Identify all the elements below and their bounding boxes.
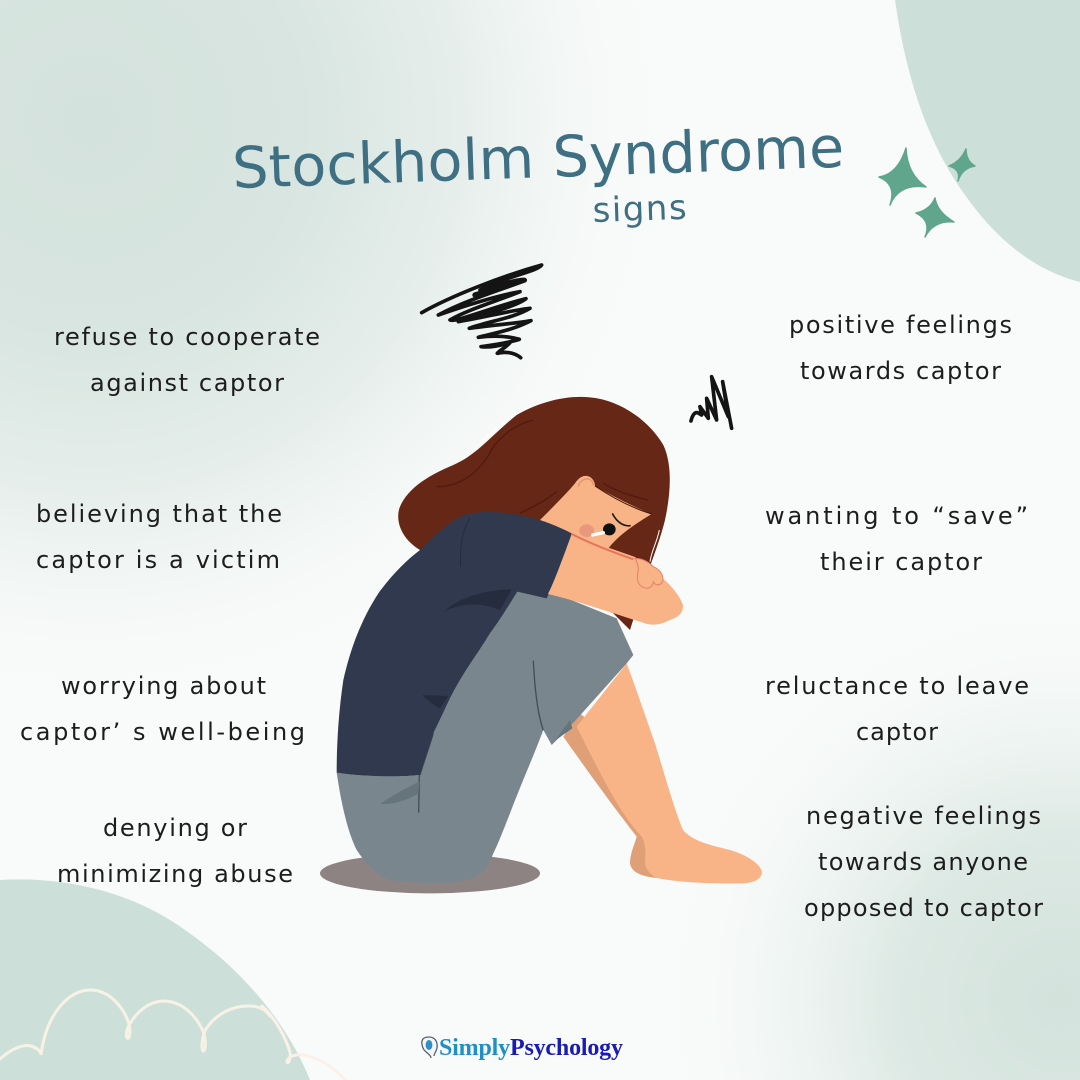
trousers	[337, 590, 633, 883]
list: right signs: captor	[856, 718, 938, 746]
ear detail	[578, 479, 593, 487]
scribble: large	[422, 265, 542, 358]
shirt	[337, 512, 572, 776]
list: right signs: negative feelings	[806, 802, 1041, 830]
list: left signs: captor is a victim	[36, 546, 280, 574]
far-side leg shading	[563, 713, 687, 878]
logo: Simply Psychology	[422, 1035, 623, 1061]
list: right signs	[765, 311, 1043, 922]
list: right signs: their captor	[820, 548, 982, 576]
title: Stockholm Syndrome	[231, 115, 845, 202]
list: left signs	[20, 323, 320, 888]
hair highlights	[480, 408, 659, 562]
sleeve fold line	[461, 518, 470, 567]
list: left signs: refuse to cooperate	[54, 323, 320, 351]
list: right signs: reluctance to leave	[765, 672, 1029, 700]
list: left signs: believing that the	[36, 500, 282, 528]
eye	[603, 523, 616, 535]
subtitle: signs	[592, 188, 687, 231]
shirt folds	[423, 589, 512, 708]
list: left signs: captor’ s well-being	[20, 718, 305, 746]
wordmark: SimplyPsychology	[439, 1035, 623, 1061]
corner shape: top right	[895, 0, 1080, 282]
near-side leg and foot	[577, 663, 762, 883]
fringe edge	[595, 486, 652, 514]
list: right signs: opposed to captor	[804, 894, 1043, 922]
list: left signs: denying or	[103, 814, 247, 842]
fringe lines	[437, 420, 648, 513]
scribble: small	[691, 377, 732, 428]
icon: sparkles	[879, 148, 975, 237]
list: left signs: worrying about	[61, 672, 266, 700]
list: left signs: against captor	[90, 369, 284, 397]
list: right signs: positive feelings	[789, 311, 1012, 339]
list: left signs: minimizing abuse	[57, 860, 293, 888]
list: right signs: towards anyone	[818, 848, 1028, 876]
illustration: crying girl hugging knees	[320, 397, 762, 893]
decorative cloud outline	[0, 990, 345, 1080]
face	[540, 476, 652, 548]
cheek	[579, 524, 594, 537]
corner shape: bottom left	[0, 879, 310, 1080]
eyebrow	[613, 514, 630, 526]
arm	[548, 534, 683, 625]
shadow	[320, 853, 540, 893]
hair	[398, 397, 670, 630]
hip fold	[380, 782, 419, 804]
trouser cuff shade	[552, 720, 572, 745]
sleeve edge	[572, 534, 633, 559]
tear	[593, 533, 603, 535]
hand	[635, 558, 663, 588]
list: right signs: wanting to “save”	[765, 502, 1028, 530]
list: right signs: towards captor	[800, 357, 1001, 385]
icon: head	[422, 1037, 437, 1058]
trouser fold lines	[419, 661, 543, 813]
